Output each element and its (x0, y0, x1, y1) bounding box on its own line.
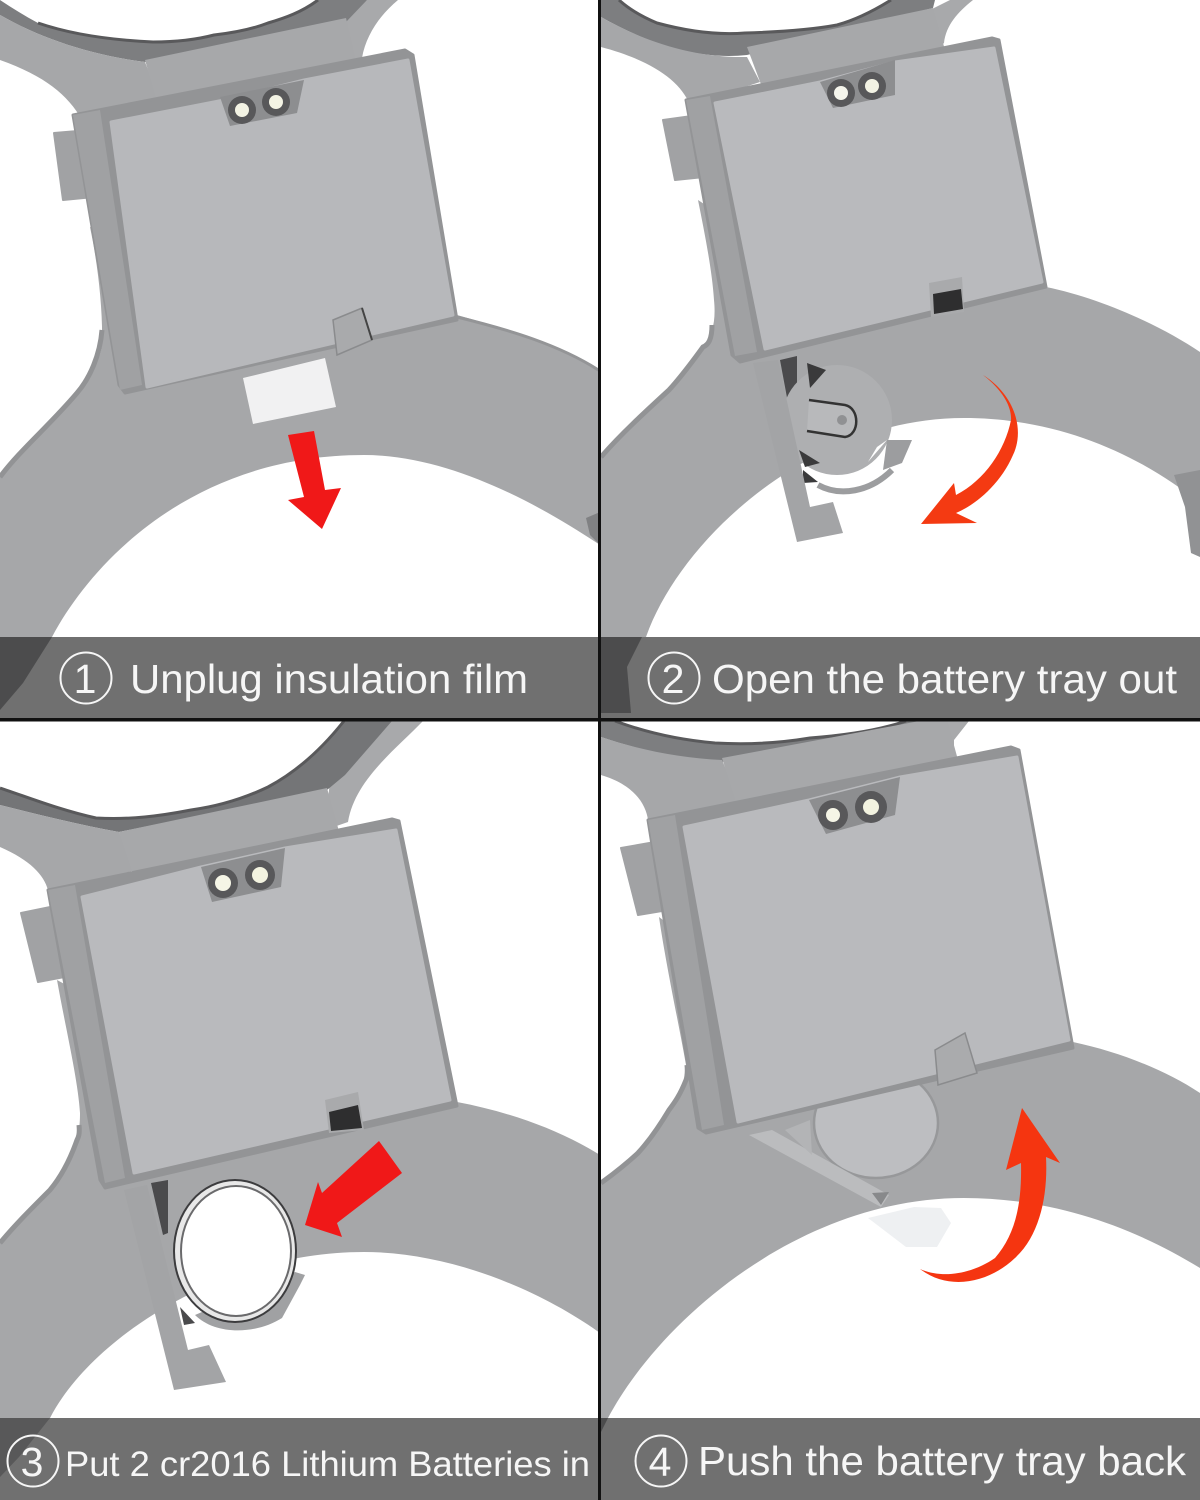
magnifier frame (0, 0, 598, 637)
arrow: insert battery (305, 1141, 402, 1237)
magnifier frame (601, 721, 1200, 1430)
battery cover (54, 18, 457, 393)
LED lights (827, 72, 886, 107)
battery cover (21, 788, 457, 1188)
magnifier frame (0, 722, 598, 1418)
arrow: swing open (921, 375, 1018, 524)
caption bar: 4 (649, 1439, 671, 1485)
battery cover (621, 716, 1073, 1133)
caption bar (0, 1418, 598, 1500)
arrow: push back (920, 1108, 1060, 1282)
magnifier frame (601, 0, 1200, 680)
caption bar: 3 (21, 1439, 43, 1485)
insulation film (243, 358, 336, 424)
caption bar (601, 637, 1200, 718)
caption bar: Put 2 cr2016 Lithium Batteries in (65, 1445, 590, 1484)
coin battery (173, 1179, 297, 1323)
caption bar: Push the battery tray back (698, 1438, 1187, 1484)
LED lights (228, 88, 290, 124)
tray faded through cover (749, 1068, 951, 1247)
LED lights (208, 860, 275, 898)
battery cover (663, 8, 1046, 362)
caption bar: 1 (74, 656, 96, 702)
panel 1: unplug insulation film (0, 0, 600, 718)
arrow: pull down (288, 431, 341, 529)
panel 3: insert batteries (0, 721, 600, 1500)
caption bar: 2 (662, 656, 684, 702)
panel 4: push tray back (601, 716, 1200, 1500)
LED lights (818, 791, 887, 830)
battery tray open (780, 356, 912, 542)
battery tray (151, 1180, 305, 1390)
caption bar (0, 637, 598, 718)
caption bar: Unplug insulation film (130, 656, 528, 702)
panel 2: open the battery tray (601, 0, 1200, 718)
caption bar (601, 1418, 1200, 1500)
caption bar: Open the battery tray out (712, 656, 1178, 702)
